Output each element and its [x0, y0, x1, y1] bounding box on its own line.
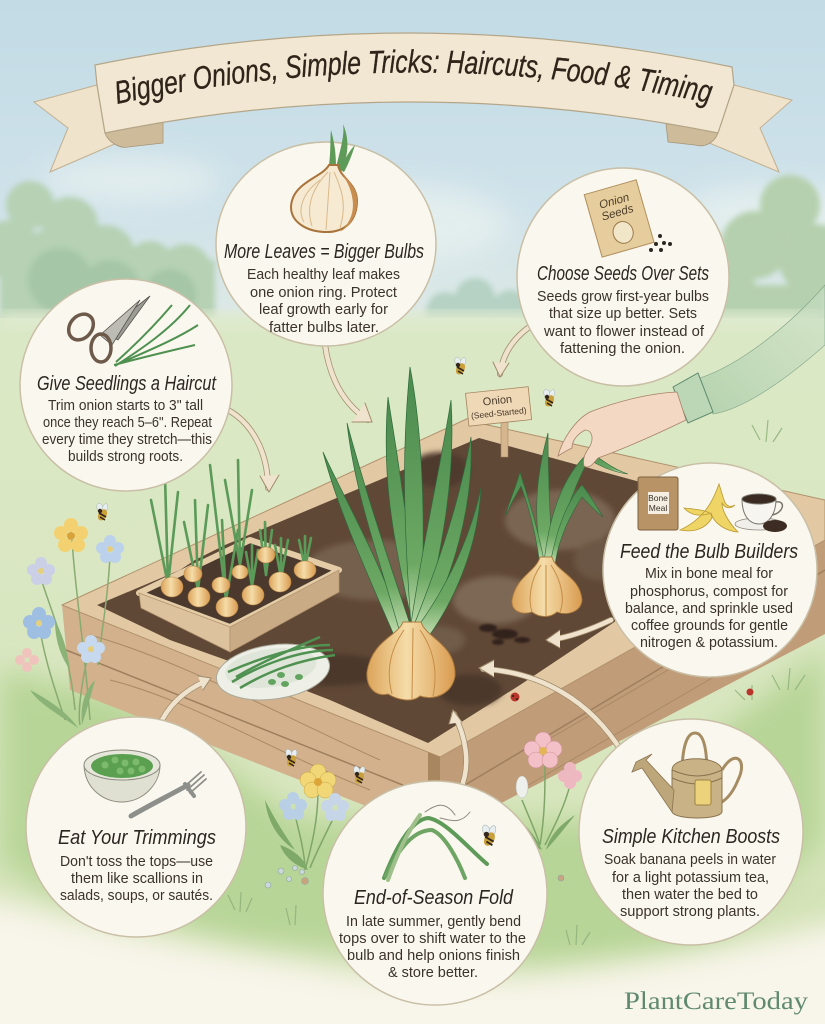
pebbles: [265, 866, 564, 888]
body text: Don't toss the tops—use: [60, 854, 213, 870]
plant marker sign: [465, 387, 532, 457]
body text: [247, 267, 400, 336]
body text: builds strong roots.: [68, 449, 183, 465]
icon: tea tag: [695, 780, 711, 805]
body text: then water the bed to: [622, 887, 758, 903]
bed: soil mottling: [270, 452, 626, 706]
background: misty horizon: [0, 312, 825, 328]
hand: [558, 392, 686, 467]
panel: seeds over sets: [517, 168, 729, 386]
body text: Each healthy leaf makes: [247, 267, 400, 283]
panel: eat your trimmings: [26, 717, 246, 937]
body text: [604, 852, 776, 920]
leaves: [323, 367, 481, 640]
arrow: haircut to tray: [224, 408, 279, 492]
arrows: [158, 322, 622, 790]
body text: phosphorus, compost for: [630, 584, 788, 600]
body text: Mix in bone meal for: [645, 566, 773, 582]
icon: bee: [481, 824, 497, 848]
icon: bowl of peas: [84, 750, 160, 802]
icon: trimmed chives: [114, 305, 198, 366]
background: sky: [0, 0, 825, 340]
banner: right tail: [666, 85, 792, 172]
background flowers: bottom right: [516, 732, 582, 850]
bulb: [367, 622, 455, 700]
body text: coffee grounds for gentle: [631, 618, 788, 634]
tray: small bulbs: [161, 547, 316, 617]
bed: top rim: [62, 417, 825, 757]
arrow: fold to soil: [449, 710, 466, 790]
icon: coffee cup: [735, 494, 783, 530]
banner: left fold: [105, 121, 163, 147]
body text: for a light potassium tea,: [612, 870, 769, 886]
arrow: kitchen boosts to soil: [479, 660, 622, 752]
background: soft clouds: [40, 158, 825, 265]
arrow: more leaves to large onion: [325, 345, 372, 422]
heading: Simple Kitchen Boosts: [602, 826, 780, 848]
icon: seed packet: Onion: [598, 192, 631, 212]
icon: bone meal bag: Meal: [649, 503, 667, 513]
body text: [625, 566, 793, 651]
plant marker sign: Onion: [482, 394, 513, 409]
heading: Give Seedlings a Haircut: [37, 373, 217, 395]
watermark: PlantCareToday: [624, 988, 809, 1015]
heading: End-of-Season Fold: [354, 887, 514, 909]
ladybugs: [510, 688, 754, 702]
body text: Seeds grow first-year bulbs: [537, 289, 709, 305]
background: distant trees: [0, 175, 825, 340]
tray: soil and walls: [139, 540, 339, 627]
arrow: seeds to sign: [493, 322, 537, 377]
body text: support strong plants.: [620, 904, 760, 920]
banner: right fold: [666, 124, 718, 146]
icon: bone meal bag: Bone: [648, 493, 668, 503]
body text: them like scallions in: [71, 871, 203, 887]
tray: seedlings back row tall leaves: [151, 460, 311, 600]
body text: [339, 914, 526, 981]
background: lower grass wash: [0, 650, 825, 965]
icon: scissors: [64, 296, 150, 362]
plant marker sign: (Seed-Started): [470, 405, 527, 421]
bees: [95, 356, 556, 785]
body text: [60, 854, 213, 904]
banner: main band: [95, 33, 734, 133]
panel: seedling haircut: [20, 279, 232, 491]
leaves: [505, 433, 628, 565]
panel: end-of-season fold: [323, 781, 547, 1005]
grass tufts: [228, 420, 805, 945]
bulb: [512, 557, 582, 616]
body text: nitrogen & potassium.: [640, 635, 778, 651]
gardener's hand and sleeve: [558, 285, 825, 467]
icon: coffee grounds: [763, 520, 787, 532]
background flowers: bottom centre: [265, 764, 349, 870]
body text: salads, soups, or sautés.: [60, 888, 213, 904]
sleeve: [700, 285, 825, 414]
icon: seed packet: Seeds: [600, 203, 635, 223]
icon: seed packet: [584, 180, 672, 257]
title: Bigger Onions, Simple Tricks: Haircuts, Food & Timing: [116, 49, 713, 108]
panel: simple kitchen boosts: [579, 719, 803, 945]
background: meadow: [0, 318, 825, 1000]
banner: left tail: [34, 85, 163, 172]
bed: front-left wooden side: [62, 605, 440, 835]
seedling tray: [139, 460, 339, 652]
body text: balance, and sprinkle used: [625, 601, 793, 617]
arrow: trimmings to plate: [158, 676, 211, 728]
heading: More Leaves = Bigger Bulbs: [224, 241, 424, 263]
body text: one onion ring. Protect: [250, 285, 397, 301]
icon: bone meal bag: [638, 477, 678, 530]
body text: Trim onion starts to 3" tall: [48, 398, 203, 414]
bed: sprinkled speckles: [479, 624, 530, 645]
body text: leaf growth early for: [259, 302, 388, 318]
background flowers: left cluster: [15, 518, 124, 728]
heading: Feed the Bulb Builders: [620, 541, 798, 563]
right onion plant: [505, 433, 628, 616]
plate of trimmings: [213, 637, 335, 707]
body text: that size up better. Sets: [549, 306, 697, 322]
icon: watering can: [632, 733, 742, 818]
body text: & store better.: [388, 965, 478, 981]
icon: banana peel: [680, 484, 738, 532]
body text: bulb and help onions finish: [347, 948, 520, 964]
bed: front-right wooden side: [440, 505, 825, 835]
background: cream paper foot: [0, 890, 825, 1024]
body text: fatter bulbs later.: [269, 320, 379, 336]
body text: [42, 398, 212, 465]
body text: every time they stretch—this: [42, 432, 212, 448]
bed: corner post: [428, 752, 440, 788]
icon: halved onion: [291, 124, 357, 232]
body text: fattening the onion.: [560, 341, 685, 357]
body text: [537, 289, 709, 357]
panel: feed the bulb builders: [603, 463, 817, 677]
icon: fork: [131, 772, 206, 816]
body text: once they reach 5–6". Repeat: [43, 415, 212, 431]
body text: want to flower instead of: [543, 324, 705, 340]
icon: folded onion tops: [384, 805, 487, 880]
title banner: [33, 32, 793, 173]
raised garden bed: [62, 417, 825, 835]
large onion plant: [323, 367, 481, 700]
cuff: [673, 373, 713, 423]
heading: Eat Your Trimmings: [58, 827, 216, 849]
arrow: feed to soil: [546, 620, 611, 648]
body text: Soak banana peels in water: [604, 852, 776, 868]
body text: In late summer, gently bend: [346, 914, 521, 930]
body text: tops over to shift water to the: [339, 931, 526, 947]
bed: soil: [97, 438, 760, 743]
heading: Choose Seeds Over Sets: [537, 263, 709, 285]
panel: more leaves: [216, 124, 436, 346]
